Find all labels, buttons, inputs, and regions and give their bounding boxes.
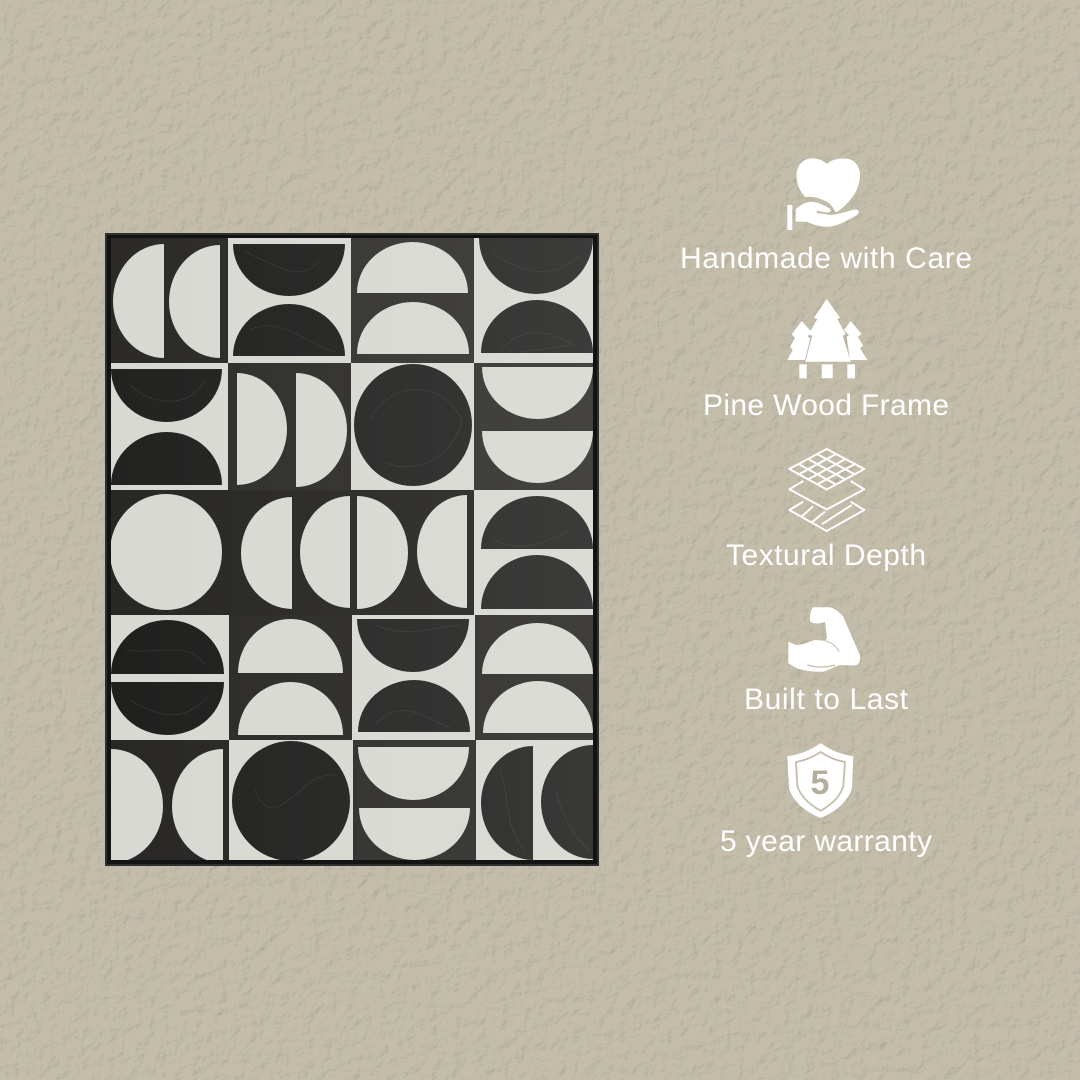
white half moons, row 3 column 2 (241, 496, 350, 609)
tile row 1, column 2: black half moons on white (233, 244, 345, 356)
label: Pine Wood Frame: Pine Wood Frame (703, 389, 949, 422)
icon: warranty shield: 5 (811, 764, 829, 802)
tile row 4, column 1: black half moons on white (111, 620, 224, 735)
label: 5 year warranty: 5 year warranty (720, 825, 932, 858)
tile row 3, column 4: black half moons on white (481, 496, 593, 609)
tile row 4, column 4: white half moons on dark (475, 615, 593, 740)
feature: built to last (744, 607, 909, 716)
canvas light sheen (342, 238, 593, 860)
artwork canvas with tiles (111, 238, 593, 860)
icon: flexed arm (788, 607, 860, 672)
label: Handmade with Care: Handmade with Care (680, 242, 972, 275)
tile row 4, column 3: black half moons on white (357, 619, 470, 732)
label: Textural Depth: Textural Depth (726, 539, 926, 572)
icon: warranty shield (787, 743, 853, 818)
tile row 2, column 3: black full circle on white (354, 364, 472, 486)
icon: stacked layers (789, 449, 864, 531)
tile row 5, column 3: white half moons on dark (353, 740, 476, 860)
brush texture marks (125, 250, 590, 850)
icon: heart in hand (787, 158, 860, 230)
icon: pine trees (787, 299, 867, 378)
feature: pine wood frame (703, 299, 949, 422)
artwork frame (105, 233, 599, 866)
tile row 1, column 4: black half moons on white (479, 238, 593, 353)
tile row 2, column 4: white half moons on dark (474, 363, 593, 490)
tile row 5, column 2: black full circle on white (232, 741, 350, 861)
white circle, row 3 column 1 (110, 494, 222, 610)
feature: five year warranty (720, 743, 932, 858)
feature: handmade with care (680, 158, 972, 275)
feature: textural depth (726, 449, 926, 572)
white half moons, row 3 column 3 (357, 495, 467, 609)
tile row 2, column 1: black half moons on white (111, 369, 222, 485)
tile row 2, column 2: white half moons on dark (228, 363, 351, 490)
tile row 3, columns 1 to 3: dark band (111, 490, 474, 615)
panel: framed geometric artwork (105, 233, 645, 866)
tile row 5, column 4: black half moons on white (481, 745, 593, 860)
label: Built to Last: Built to Last (744, 683, 909, 716)
tile row 1, column 1: white half moons on dark (111, 238, 228, 363)
tile row 4, column 2: white half moons on dark (229, 615, 352, 740)
tile row 1, column 3: white half moons on dark (351, 238, 474, 363)
tile row 5, column 1: white half moons on dark (111, 740, 229, 863)
